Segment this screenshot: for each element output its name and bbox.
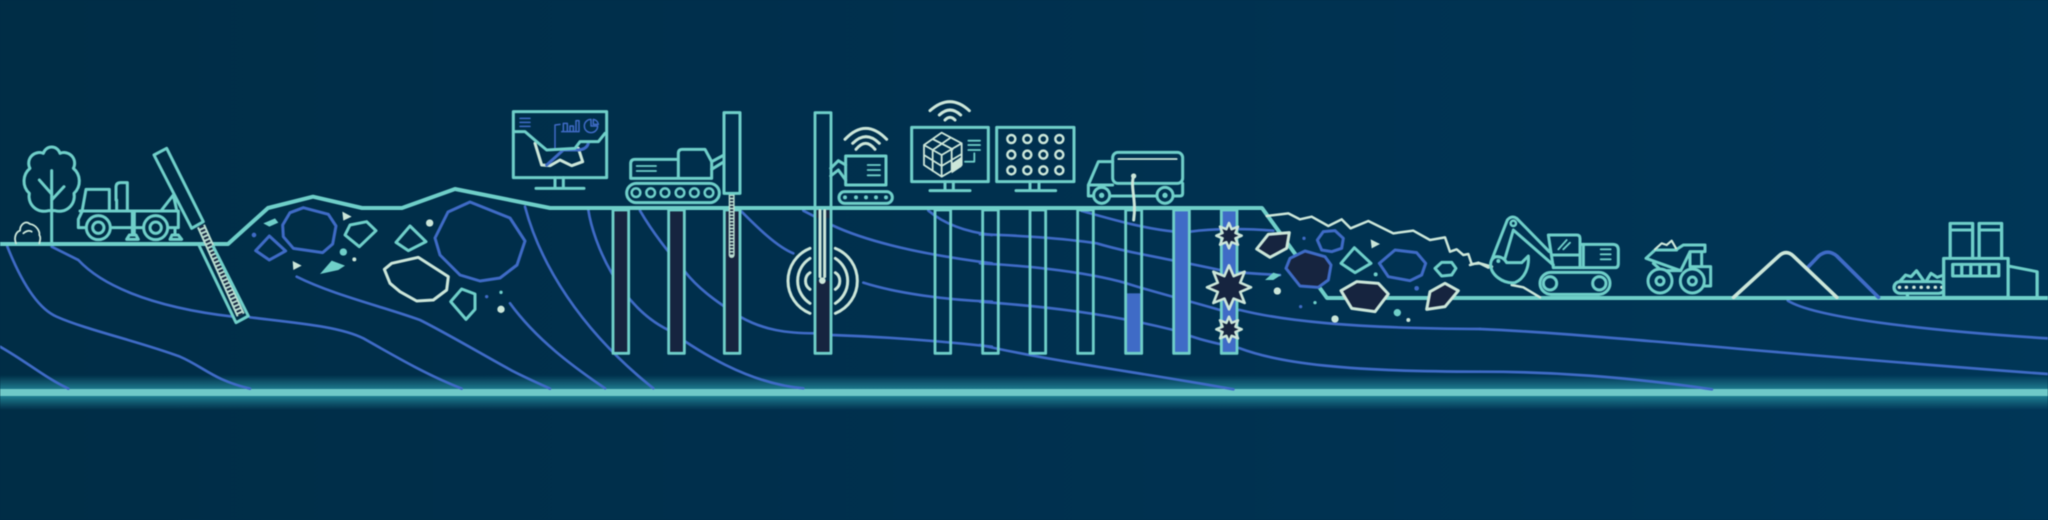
exploration scene — [15, 147, 505, 323]
icon: drill truck — [78, 183, 182, 240]
icon: bush — [15, 223, 40, 243]
icon: stockpiles — [1734, 252, 1878, 297]
rocks: hill — [252, 208, 505, 319]
rough blasted surface — [1267, 213, 1492, 267]
loading and hauling scene — [1470, 217, 1711, 297]
icon: monitor with dot grid — [997, 127, 1074, 191]
ground surface — [0, 189, 2048, 298]
icon: dump truck — [1646, 241, 1711, 293]
icon: blast stars — [1207, 223, 1251, 342]
icon: excavator — [1491, 217, 1618, 294]
icon: processing plant — [1944, 223, 2037, 297]
blasting and excavation scene — [997, 127, 1492, 342]
icon: tree — [24, 147, 79, 243]
boreholes and piles — [613, 113, 1237, 353]
pile: dark boreholes — [613, 113, 998, 353]
rough surface under excavator — [1470, 263, 1540, 297]
large blue rock — [435, 202, 525, 281]
angled drill rod — [154, 148, 248, 323]
icon: conveyor — [1894, 271, 1945, 297]
icon: monitor with block model — [912, 102, 988, 191]
glowing bedrock band — [0, 375, 2048, 410]
blue strata lines — [0, 207, 2048, 389]
stockpiles and processing scene — [1734, 223, 2037, 297]
icon: monitor with mine model — [513, 112, 607, 188]
icon: tracked wireless sensor — [831, 128, 892, 203]
pile: charged boreholes — [1030, 210, 1237, 353]
fragmented rocks — [1257, 231, 1458, 323]
icon: downhole sensor with signal waves — [788, 211, 857, 313]
drilling and monitoring scene — [513, 102, 988, 313]
icon: charging truck — [1088, 152, 1183, 220]
icon: crawler drill rig — [627, 113, 740, 255]
